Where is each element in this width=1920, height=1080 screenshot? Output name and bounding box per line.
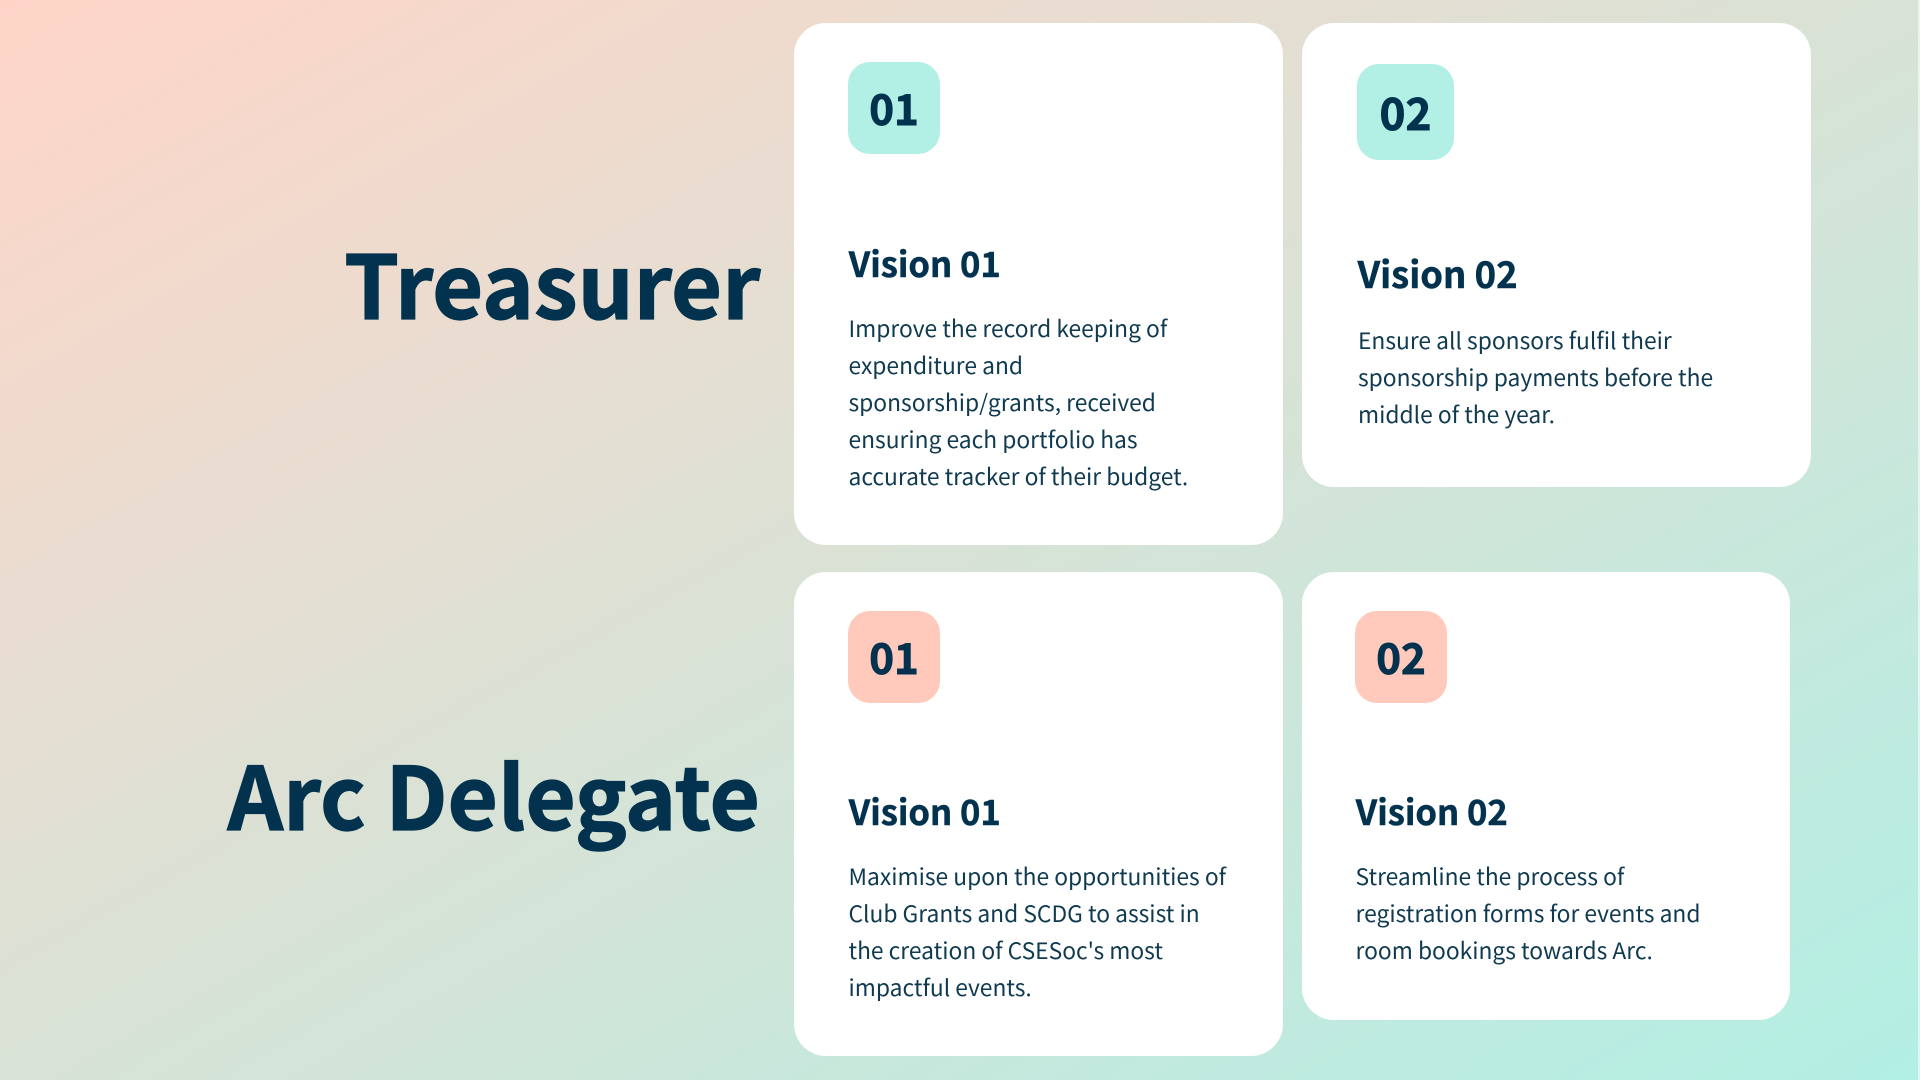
subheading: Vision 01: Vision 01	[849, 785, 1001, 835]
panel: Treasurer vision 01	[794, 23, 1283, 545]
text: Treasurer vision 01 description: accurate tracker of their budget.	[848, 459, 1188, 492]
text: Treasurer vision 01 description: sponsorship/grants, received	[848, 385, 1156, 418]
text: Arc Delegate vision 01 description: the creation of CSESoc's most	[848, 933, 1163, 966]
text: Treasurer vision 02 description	[1358, 323, 1713, 430]
heading: Treasurer: Treasurer	[344, 218, 760, 345]
text: Treasurer vision 01 description	[848, 311, 1188, 492]
subheading: Vision 02: Vision 02	[1356, 785, 1508, 835]
text: Treasurer vision 02 description: middle of the year.	[1358, 397, 1555, 430]
text: Arc Delegate vision 02 description	[1356, 859, 1700, 966]
text: Treasurer vision 01 description: ensuring each portfolio has	[848, 422, 1138, 455]
badge: 01	[848, 62, 940, 154]
badge: 02: 02	[1380, 79, 1431, 143]
text: Arc Delegate vision 01 description: impactful events.	[848, 970, 1032, 1003]
subheading: Vision 01: Vision 01	[849, 237, 1001, 287]
badge: 01: 01	[869, 626, 919, 687]
text: Treasurer vision 02 description: Ensure all sponsors fulfil their	[1358, 323, 1672, 356]
heading: Arc Delegate: Arc Delegate	[227, 730, 760, 856]
text: Arc Delegate vision 02 description: room bookings towards Arc.	[1356, 933, 1653, 966]
panel: Arc Delegate vision 02	[1302, 572, 1790, 1020]
badge: 02	[1355, 611, 1447, 703]
text: Treasurer vision 01 description: Improve the record keeping of	[848, 311, 1167, 344]
badge: 02: 02	[1376, 626, 1426, 687]
panel: Treasurer vision 02	[1302, 23, 1811, 487]
badge: 01: 01	[869, 77, 919, 138]
badge: 01	[848, 611, 940, 703]
panel: Arc Delegate vision 01	[794, 572, 1283, 1056]
text: Treasurer vision 01 description: expenditure and	[848, 348, 1023, 381]
text: Arc Delegate vision 01 description: Maximise upon the opportunities of	[848, 859, 1226, 892]
text: Treasurer vision 02 description: sponsorship payments before the	[1358, 360, 1713, 393]
text: Arc Delegate vision 01 description: Club Grants and SCDG to assist in	[848, 896, 1200, 929]
text: Arc Delegate vision 02 description: registration forms for events and	[1356, 896, 1700, 929]
subheading: Vision 02: Vision 02	[1358, 247, 1518, 299]
text: Arc Delegate vision 02 description: Streamline the process of	[1356, 859, 1624, 892]
badge: 02	[1357, 64, 1454, 160]
text: Arc Delegate vision 01 description	[848, 859, 1227, 1003]
